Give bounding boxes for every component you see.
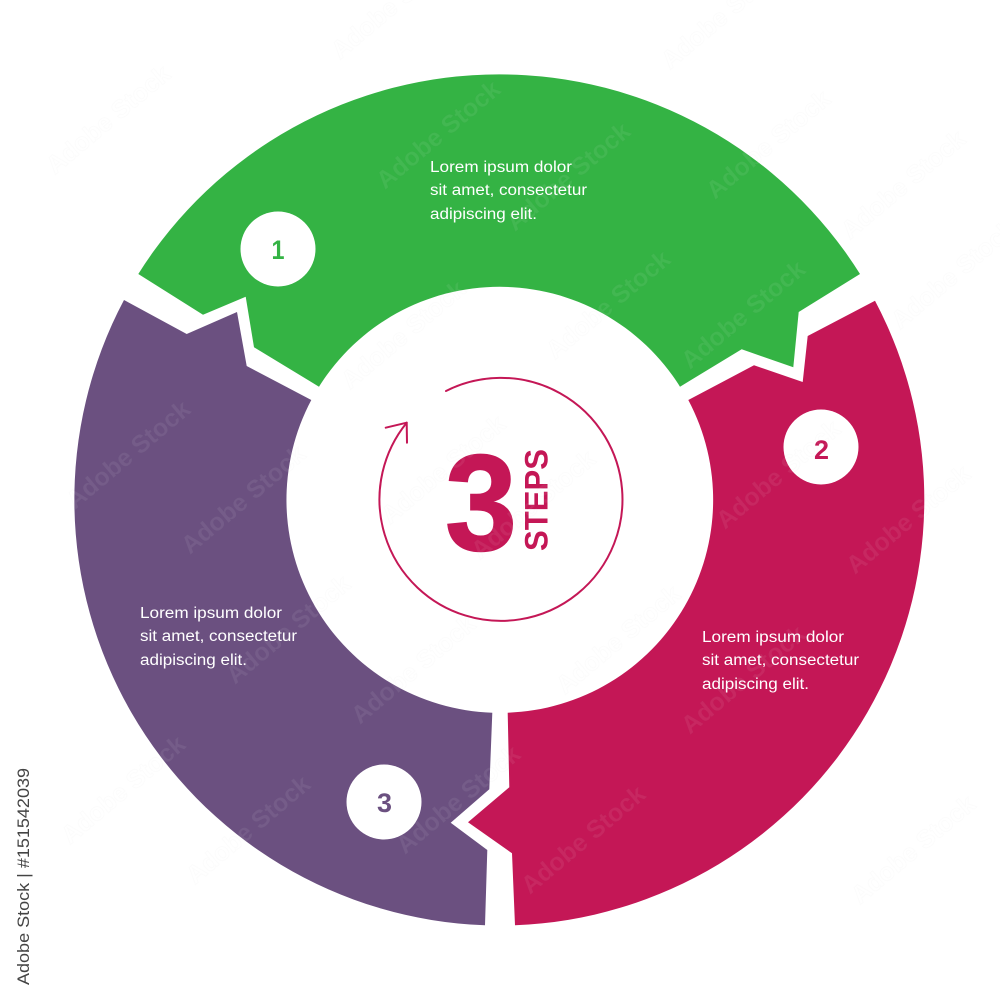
watermarks: Adobe Stock [346, 610, 481, 730]
text block 2 [702, 629, 859, 693]
text block 1: sit amet, consectetur [430, 182, 587, 199]
watermarks: Adobe Stock [176, 440, 311, 560]
watermarks: Adobe Stock [391, 740, 526, 860]
watermarks: Adobe Stock [336, 275, 471, 395]
watermarks: Adobe Stock [61, 395, 196, 515]
segment 3: purple [74, 300, 492, 925]
watermarks: Adobe Stock [676, 620, 811, 740]
stock id label: Adobe Stock | #151542039 [14, 768, 33, 985]
watermarks: Adobe Stock [676, 255, 811, 375]
badge 3 [346, 764, 422, 840]
watermarks: Adobe Stock [376, 410, 511, 530]
center label: 3 steps: 3 [445, 427, 517, 580]
text block 3: adipiscing elit. [140, 652, 247, 669]
text block 1: Lorem ipsum dolor [430, 159, 572, 176]
watermarks: Adobe Stock [516, 780, 651, 900]
text block 2: sit amet, consectetur [702, 652, 859, 669]
watermarks: Adobe Stock [371, 75, 506, 195]
segment 2: magenta [468, 301, 924, 925]
badge 1: 1 [272, 235, 284, 265]
center cycle arrow [379, 378, 622, 621]
watermarks: Adobe Stock [711, 415, 846, 535]
text block 1: adipiscing elit. [430, 206, 537, 223]
watermarks: Adobe Stock [181, 770, 316, 890]
center label: 3 steps [445, 427, 554, 580]
badge 1 [240, 212, 316, 286]
watermarks: Adobe Stock [541, 245, 676, 365]
text block 2: Lorem ipsum dolor [702, 629, 844, 646]
watermarks: Adobe Stock [41, 60, 176, 180]
badge 2 [784, 410, 858, 484]
segment 1: green [138, 74, 860, 387]
badge 2: 2 [814, 435, 829, 465]
watermarks: Adobe Stock [841, 460, 976, 580]
watermarks: Adobe Stock [466, 445, 601, 565]
watermarks: Adobe Stock [701, 85, 836, 205]
watermarks: Adobe Stock [846, 790, 981, 910]
watermarks: Adobe Stock [221, 570, 356, 690]
watermarks: Adobe Stock [56, 730, 191, 850]
watermarks: Adobe Stock [501, 117, 636, 237]
watermarks: Adobe Stock [551, 580, 686, 700]
text block 3: sit amet, consectetur [140, 628, 297, 645]
center label: 3 steps: STEPS [518, 449, 554, 551]
text block 1 [430, 159, 587, 223]
text block 3 [140, 605, 297, 669]
text block 3: Lorem ipsum dolor [140, 605, 282, 622]
watermarks: Adobe Stock [836, 125, 971, 245]
text block 2: adipiscing elit. [702, 676, 809, 693]
badge 3: 3 [377, 788, 392, 818]
